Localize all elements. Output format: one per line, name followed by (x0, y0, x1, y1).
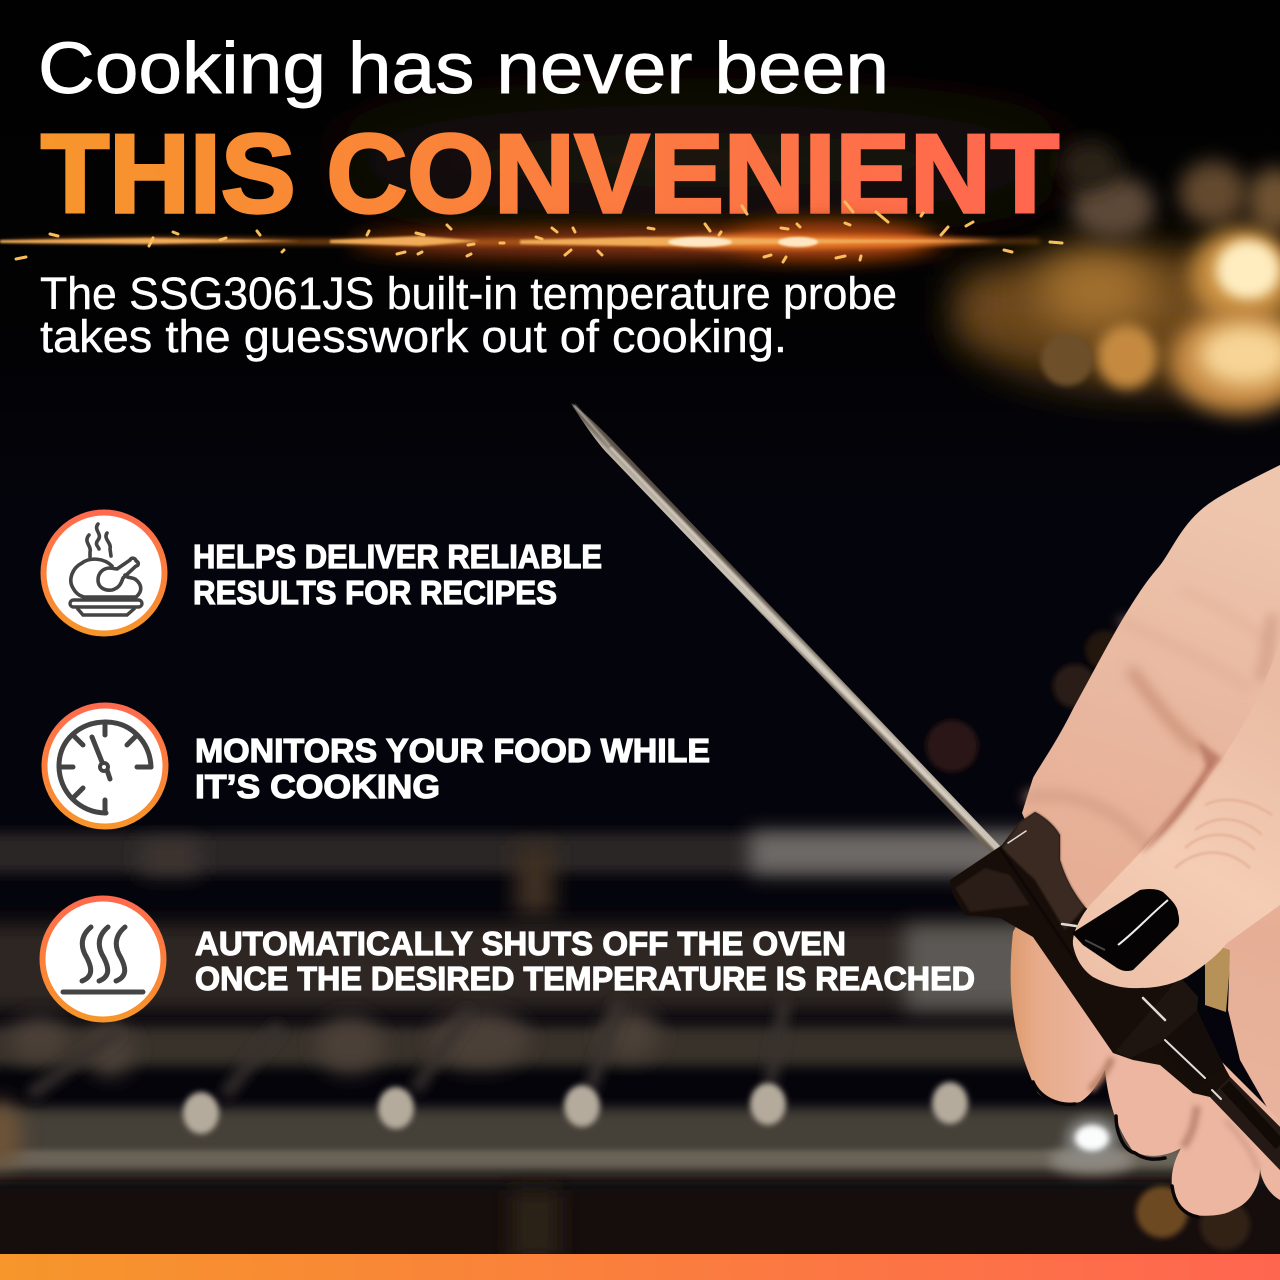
title line one: Cooking has never been (38, 29, 889, 109)
subheading (40, 268, 897, 362)
feature 1 (44, 512, 602, 634)
feature 3 text: AUTOMATICALLY SHUTS OFF THE OVEN (195, 925, 846, 962)
title line two: THIS CONVENIENT (41, 112, 1059, 236)
feature 1 text (193, 538, 602, 611)
thumb (1072, 640, 1280, 988)
lower fingers (1011, 900, 1280, 1216)
feature 3 text (195, 925, 975, 997)
feature 2 text: IT’S COOKING (195, 768, 440, 805)
gap behind fingers (1205, 940, 1232, 1012)
finger creases (1090, 1058, 1258, 1170)
feature 2 text: MONITORS YOUR FOOD WHILE (195, 732, 710, 769)
icon: dial gauge (44, 706, 166, 826)
probe handle (950, 812, 1280, 1170)
knuckle shadows (1025, 590, 1273, 845)
spark line divider (0, 202, 1062, 262)
subheading: takes the guesswork out of cooking. (40, 311, 787, 362)
feature 1 text: RESULTS FOR RECIPES (193, 574, 557, 611)
feature 1 text: HELPS DELIVER RELIABLE (193, 538, 602, 575)
thumb crease (1140, 760, 1215, 853)
icon: rising heat (42, 898, 164, 1020)
feature 3 (42, 898, 975, 1020)
thumbnail (1072, 889, 1179, 971)
bottom gradient bar (0, 1254, 1280, 1280)
nail edges on lower fingers (1033, 1082, 1198, 1217)
icon: roast chicken (44, 512, 164, 634)
probe needle (571, 403, 1002, 858)
hand behind probe (1011, 465, 1280, 1217)
subheading: The SSG3061JS built-in temperature probe (40, 268, 897, 319)
hand shape (1022, 465, 1280, 1130)
feature 3 text: ONCE THE DESIRED TEMPERATURE IS REACHED (195, 960, 975, 997)
feature 2 text (195, 732, 710, 805)
feature 2 (44, 706, 710, 826)
